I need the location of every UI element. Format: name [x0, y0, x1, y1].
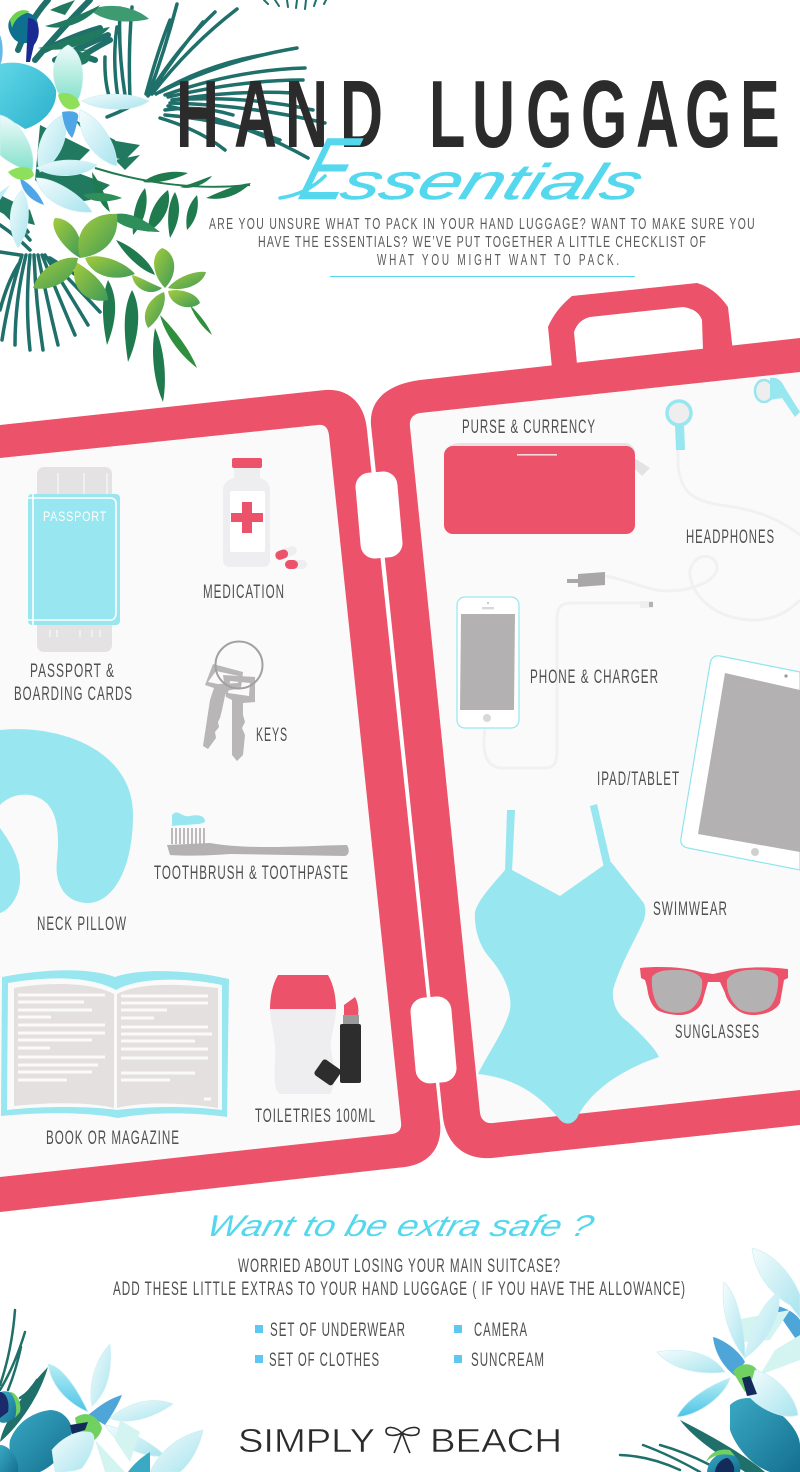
- icon: phone and charger: [457, 556, 800, 768]
- suitcase left half: [0, 390, 440, 1212]
- right panel interior: [410, 372, 800, 1123]
- orchid upper: [38, 45, 149, 172]
- heading: want to be extra safe: Want to be extra safe ?: [203, 1210, 598, 1243]
- hinge bottom: [409, 995, 458, 1085]
- suitcase handle: [548, 283, 733, 368]
- passport label: PASSPORT: [43, 508, 107, 524]
- orchid lower: [0, 115, 97, 248]
- icon: book or magazine: [1, 970, 229, 1118]
- text: worried about main suitcase: [113, 1256, 686, 1300]
- foliage: top center palm tip: [264, 0, 326, 9]
- intro text: [209, 216, 756, 277]
- logo: simply beach: SIMPLY: [238, 1422, 375, 1459]
- label: neck pillow: NECK PILLOW: [37, 914, 127, 935]
- label: toothbrush and toothpaste: TOOTHBRUSH & TOOTHPASTE: [154, 863, 349, 884]
- hummingbird: [8, 12, 38, 43]
- icon: purse: [444, 443, 650, 534]
- label: medication: MEDICATION: [203, 582, 285, 603]
- label: book or magazine: BOOK OR MAGAZINE: [46, 1128, 180, 1149]
- label: toiletries: TOILETRIES 100ML: [255, 1106, 376, 1127]
- intro text: WHAT YOU MIGHT WANT TO PACK.: [377, 252, 622, 269]
- subtitle script: Essentials: ssentials: [334, 154, 650, 210]
- icon: sunglasses: [640, 967, 788, 1015]
- subtitle script: Essentials: [280, 121, 650, 218]
- turquoise blob: [0, 63, 56, 129]
- label: passport and boarding cards: [14, 661, 133, 705]
- list of extras: SET OF UNDERWEAR: [270, 1320, 406, 1341]
- icon: toothbrush and toothpaste: [167, 812, 349, 856]
- subtitle script: Essentials: E: [290, 121, 369, 218]
- list of extras: SUNCREAM: [471, 1350, 545, 1371]
- icon: toiletries: [270, 975, 361, 1094]
- icon: passport and boarding cards: [28, 467, 120, 652]
- label: swimwear: SWIMWEAR: [653, 899, 728, 920]
- plumeria flower small: [132, 248, 206, 328]
- list of extras: CAMERA: [474, 1320, 528, 1341]
- palm frond upper right: [105, 4, 325, 158]
- icon: swimwear: [475, 804, 659, 1124]
- list of extras: [255, 1320, 545, 1371]
- label: passport and boarding cards: PASSPORT &: [30, 661, 115, 682]
- icon: headphones: [667, 378, 800, 535]
- icon: medication: [223, 458, 307, 569]
- label: keys: KEYS: [256, 725, 288, 746]
- foliage: bottom right flowers: [620, 1248, 800, 1472]
- foliage: top left palm and flowers: [0, 0, 325, 402]
- small frond with dark leaves: [95, 168, 250, 187]
- icon: keys: [203, 642, 262, 761]
- hinge top: [354, 470, 404, 560]
- icon: neck pillow: [0, 729, 133, 913]
- text: worried about main suitcase: WORRIED ABOUT LOSING YOUR MAIN SUITCASE?: [238, 1256, 561, 1277]
- title: HAND LUGGAGE: [176, 60, 780, 167]
- foliage: bottom left flowers: [0, 1310, 203, 1472]
- long leaves under flowers: [103, 280, 115, 345]
- left panel interior: [0, 425, 401, 1177]
- palm frond lower left: [0, 195, 102, 350]
- logo: simply beach: BEACH: [430, 1422, 562, 1459]
- suitcase right half: [371, 338, 800, 1158]
- label: phone and charger: PHONE & CHARGER: [530, 667, 659, 688]
- logo: simply beach: [238, 1422, 562, 1459]
- label: ipad: IPAD/TABLET: [597, 769, 680, 790]
- plumeria flower large: [33, 214, 135, 301]
- label: passport and boarding cards: BOARDING CARDS: [14, 684, 133, 705]
- dark leaves top: [18, 0, 110, 65]
- dark foliage behind orchids: [0, 120, 140, 225]
- label: purse: PURSE & CURRENCY: [462, 417, 596, 438]
- list of extras: SET OF CLOTHES: [269, 1350, 380, 1371]
- icon: ipad: [681, 656, 800, 870]
